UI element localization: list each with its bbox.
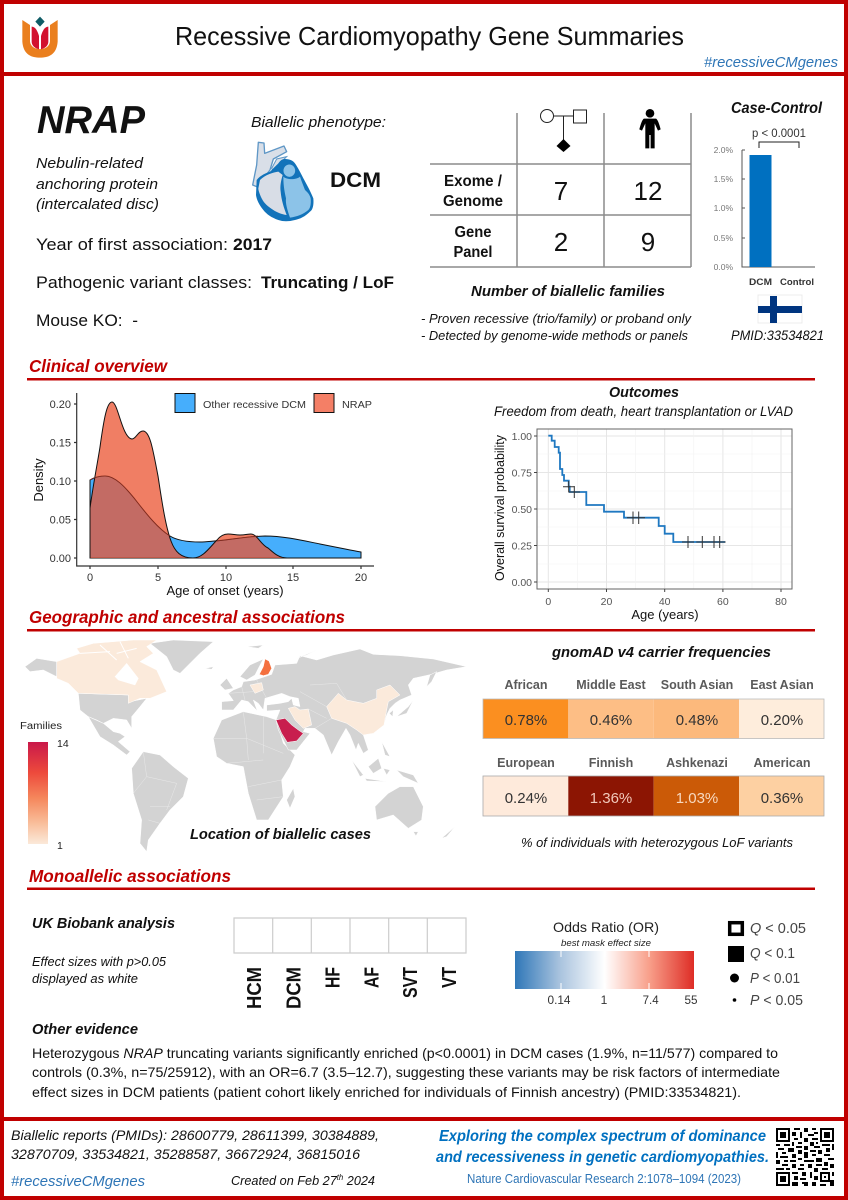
significance legend: P < 0.05 (750, 993, 803, 1009)
creation date: th (337, 1173, 344, 1182)
heading: geographic and ancestral associations: Geographic and ancestral associations (29, 607, 345, 627)
protein description: Nebulin-related (36, 155, 144, 172)
bar chart: 1.0% (714, 203, 733, 213)
significance legend: Q < 0.1 (750, 946, 795, 962)
paper title: and recessiveness in genetic cardiomyopathies. (436, 1149, 769, 1166)
UK Biobank note: displayed as white (32, 972, 138, 986)
density y labels: 0.20 (50, 399, 71, 411)
survival x labels: 60 (717, 596, 729, 608)
bar chart (714, 145, 815, 287)
grid labels: AF (362, 967, 384, 988)
significance bracket: p < 0.0001 (752, 126, 806, 140)
density x labels: 10 (220, 572, 232, 584)
odds ratio colour legend: 55 (684, 993, 698, 1007)
heatmap caption: % of individuals with heterozygous LoF variants (521, 835, 793, 850)
heatmap row 2: 0.24% (505, 790, 547, 807)
survival x labels: 80 (775, 596, 787, 608)
outcomes title: Outcomes (609, 384, 679, 401)
significance legend: Q < 0.05 (750, 921, 806, 937)
UK Biobank note: Effect sizes with p>0.05 (32, 955, 166, 969)
PMID: PMID:33534821 (731, 328, 824, 343)
row label: gene panel (454, 224, 492, 261)
bar chart: 1.5% (714, 174, 733, 184)
density y labels: 0.15 (50, 438, 71, 450)
odds ratio colour legend: Odds Ratio (OR) (553, 919, 659, 935)
other evidence text: effect sizes in DCM patients (patient cohort likely enriched for individuals of Finnish ancestry) (PMID:33534821). (32, 1084, 741, 1100)
icon: logo (22, 17, 58, 58)
survival y labels: 0.00 (512, 577, 532, 589)
map legend: 1 (57, 840, 63, 852)
Poland (250, 683, 263, 693)
survival x labels (545, 596, 787, 608)
heatmap row 1: 0.20% (761, 712, 803, 729)
table values: 12 (634, 176, 662, 206)
heatmap row 1: 0.46% (590, 712, 632, 729)
footer hashtag: #recessiveCMgenes (11, 1173, 145, 1190)
censor marks (563, 481, 726, 548)
density y labels: 0.00 (50, 553, 71, 565)
heatmap row 2: Finnish (589, 756, 633, 770)
Americas, Africa and Oceania (25, 640, 455, 852)
footer (11, 1127, 835, 1190)
table values: 2 (554, 227, 568, 257)
grid labels: HCM (244, 967, 266, 1009)
effect-size grid (234, 918, 466, 953)
bar chart: 0.0% (714, 262, 733, 272)
Iran (288, 707, 312, 728)
UK Biobank note (32, 955, 166, 986)
density axis titles (31, 458, 284, 598)
survival x labels: 40 (659, 596, 671, 608)
icon: person (639, 109, 661, 148)
odds ratio colour legend: 7.4 (643, 993, 659, 1007)
heatmap row 2: European (497, 756, 555, 770)
odds ratio colour legend: 1 (601, 993, 608, 1007)
world map (25, 640, 467, 852)
table notes: - Proven recessive (trio/family) or proband only (421, 311, 692, 326)
protein description: anchoring protein (36, 176, 158, 193)
survival x labels: 0 (545, 596, 551, 608)
survival y labels: 0.50 (512, 504, 532, 516)
mouse KO: Mouse KO: - (36, 311, 138, 330)
icon: QR code (775, 1127, 835, 1187)
table caption: Number of biallelic families (471, 283, 665, 300)
variant classes: Pathogenic variant classes: (36, 273, 252, 292)
table values: 7 (554, 176, 568, 206)
paper title: Exploring the complex spectrum of dominance (439, 1128, 766, 1145)
grid labels: HF (323, 967, 345, 988)
grid labels: VT (439, 967, 461, 988)
title: Recessive Cardiomyopathy Gene Summaries (175, 21, 684, 51)
density x labels (87, 572, 367, 584)
bar chart: 2.0% (714, 145, 733, 155)
survival y labels: 1.00 (512, 431, 532, 443)
row label: exome genome: Genome (443, 193, 503, 210)
bar chart: Control (780, 277, 814, 287)
density x labels: 15 (287, 572, 299, 584)
panel: UK Biobank analysis (32, 915, 806, 1009)
heatmap row 2: 1.36% (590, 790, 632, 807)
heatmap title: gnomAD v4 carrier frequencies (551, 644, 771, 661)
density y labels: 0.05 (50, 514, 71, 526)
row label: exome genome: Exome / (444, 173, 503, 190)
heatmap row 2: American (754, 756, 810, 770)
row label: exome genome (443, 173, 503, 210)
density x labels: 20 (355, 572, 367, 584)
China (327, 685, 400, 735)
density axis titles: Age of onset (years) (166, 583, 284, 598)
significance legend: P < 0.01 (750, 971, 800, 987)
variant classes: Truncating / LoF (261, 273, 394, 292)
table notes: - Detected by genome-wide methods or panels (421, 328, 688, 343)
bar chart: 0.5% (714, 233, 733, 243)
density axis titles: Density (31, 458, 46, 502)
country borders (133, 712, 283, 823)
protein description: (intercalated disc) (36, 196, 159, 213)
table values (554, 176, 662, 257)
survival y labels (512, 431, 532, 589)
heatmap row 1: 0.48% (676, 712, 718, 729)
outcomes subtitle: Freedom from death, heart transplantation or LVAD (494, 404, 793, 419)
density y labels (50, 399, 71, 565)
table notes (421, 311, 692, 343)
heading: monoallelic associations: Monoallelic associations (29, 866, 231, 886)
other evidence text: controls (0.3%, n=75/25912), with an OR=6.7 (3.5–12.7), suggesting these variants may be risk factors of intermediate (32, 1064, 780, 1080)
survival x labels: 20 (601, 596, 612, 608)
protein description (36, 155, 159, 213)
creation date: 2024 (343, 1173, 375, 1188)
panel: other evidence (32, 1021, 780, 1100)
biallelic reports: Biallelic reports (PMIDs): 28600779, 28611399, 30384889, (11, 1127, 379, 1143)
significance legend (728, 921, 806, 1009)
survival axis titles: Age (years) (631, 607, 699, 622)
survival axis titles (493, 434, 699, 622)
table values: 9 (641, 227, 655, 257)
density chart (31, 393, 374, 598)
Canada (57, 640, 167, 703)
map legend (20, 721, 69, 852)
heatmap row 1 (483, 678, 824, 738)
biallelic reports (11, 1127, 379, 1162)
Eurasia (205, 645, 467, 783)
row label: gene panel: Gene (454, 224, 492, 241)
year of first association: Year of first association: (36, 235, 228, 254)
significance bracket (752, 126, 806, 148)
Saudi Arabia (276, 718, 303, 742)
density legend: NRAP (342, 399, 372, 411)
heatmap row 2: 0.36% (761, 790, 803, 807)
survival grid and frame (534, 429, 792, 592)
bar chart: DCM (749, 277, 772, 287)
heading: clinical overview: Clinical overview (29, 356, 168, 376)
header (22, 17, 838, 71)
heatmap row 1: 0.78% (505, 712, 547, 729)
heatmap row 1: African (504, 678, 548, 692)
other evidence heading: Other evidence (32, 1021, 138, 1038)
journal citation: Nature Cardiovascular Research 2:1078–1094 (2023) (467, 1172, 741, 1186)
survival y labels: 0.75 (512, 468, 532, 480)
table grid (430, 113, 691, 267)
paper title (436, 1128, 769, 1166)
variant classes (36, 273, 394, 292)
hashtag: #recessiveCMgenes (704, 54, 838, 71)
survival curve (548, 436, 725, 542)
heatmap row 1: South Asian (661, 678, 733, 692)
year of first association: 2017 (233, 235, 272, 254)
odds ratio colour legend: 0.14 (548, 993, 571, 1007)
map caption: Location of biallelic cases (190, 826, 371, 843)
heatmap row 2: Ashkenazi (666, 756, 728, 770)
heatmap row 1: East Asian (750, 678, 814, 692)
panel: gene summary (36, 99, 394, 330)
other evidence text (32, 1045, 780, 1100)
density x labels: 0 (87, 572, 93, 584)
case-control title: Case-Control (731, 100, 823, 117)
survival axis titles: Overall survival probability (493, 434, 507, 581)
density legend: Other recessive DCM (203, 399, 306, 411)
gene name: NRAP (37, 99, 146, 142)
phenotype: DCM (330, 169, 381, 192)
Eurasian borders (228, 680, 347, 728)
map legend: Families (20, 721, 62, 732)
panel: gnomAD heatmap (483, 644, 824, 850)
grid labels: SVT (400, 967, 422, 998)
panel: case-control (714, 100, 824, 343)
creation date: Created on Feb 27 (231, 1173, 339, 1188)
icon: Finland flag (758, 295, 802, 323)
survival chart (493, 384, 793, 622)
odds ratio colour legend (515, 919, 698, 1007)
icon: heart (253, 142, 313, 221)
UK Biobank heading: UK Biobank analysis (32, 915, 175, 932)
map legend: 14 (57, 738, 69, 750)
grid labels: DCM (284, 967, 306, 1009)
heatmap row 1: Middle East (576, 678, 647, 692)
other evidence text: Heterozygous NRAP truncating variants significantly enriched (p<0.0001) in DCM cases (1.9%, n=11/577) compared to (32, 1045, 778, 1061)
density curves (90, 402, 361, 558)
row label: gene panel: Panel (454, 244, 492, 261)
density legend (175, 394, 372, 412)
density x labels: 5 (155, 572, 161, 584)
phenotype label: Biallelic phenotype: (251, 115, 386, 131)
panel: number of biallelic families table (421, 109, 692, 343)
biallelic reports: 32870709, 33534821, 35288587, 36672924, 36815016 (11, 1146, 360, 1162)
density axes (74, 393, 374, 569)
survival y labels: 0.25 (512, 540, 532, 552)
Finland (259, 659, 272, 676)
heatmap row 2: 1.03% (676, 790, 718, 807)
icon: pedigree (540, 110, 586, 152)
density y labels: 0.10 (50, 476, 71, 488)
grid labels (244, 967, 461, 1009)
heatmap row 2 (483, 756, 824, 816)
odds ratio colour legend: best mask effect size (561, 938, 651, 949)
